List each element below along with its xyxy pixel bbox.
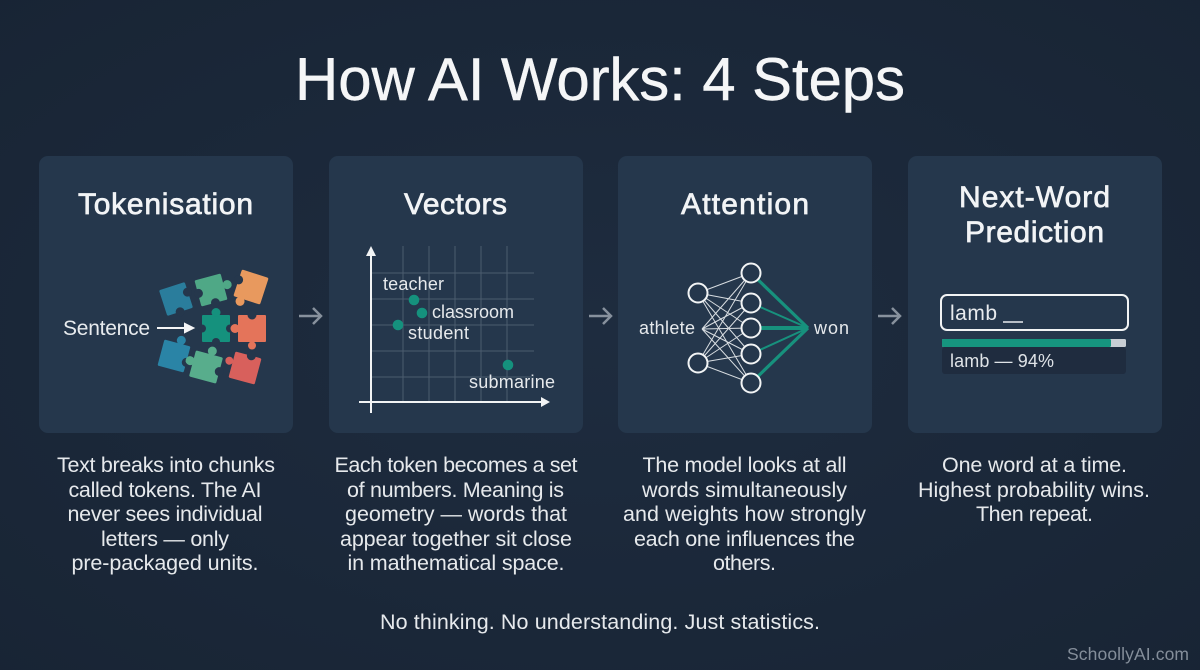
chart: word vector space: teacher xyxy=(383,274,444,294)
text: vectors description: appear together sit close xyxy=(340,527,572,551)
text: attention description: others. xyxy=(713,551,776,575)
diagram: neural network xyxy=(639,264,849,392)
arrow: step 2 to 3 xyxy=(589,308,611,324)
panel: tokenisation xyxy=(39,156,293,433)
input box: lamb xyxy=(950,302,997,325)
text: prediction description: One word at a time. xyxy=(942,453,1127,477)
probability bar xyxy=(942,339,1126,374)
text: tokenisation description: Text breaks into chunks xyxy=(57,453,275,477)
panel: next-word prediction xyxy=(908,156,1162,433)
text: vectors description: in mathematical space. xyxy=(348,551,564,575)
chart: word vector space: submarine xyxy=(469,372,555,392)
icon: puzzle pieces xyxy=(157,268,269,385)
probability bar: lamb — 94% xyxy=(950,351,1054,371)
chart: word vector space xyxy=(359,246,555,413)
heading: next-word prediction: Prediction xyxy=(965,216,1104,249)
text: tokenisation description: never sees individual xyxy=(68,502,262,526)
arrow: step 1 to 2 xyxy=(299,308,321,324)
arrow: sentence to tokens xyxy=(157,324,193,332)
text: vectors description: geometry — words that xyxy=(345,502,567,526)
text: attention description: words simultaneously xyxy=(641,478,847,502)
text: tokenisation description: called tokens. The AI xyxy=(68,478,262,502)
text: tokenisation description xyxy=(57,453,275,575)
text: vectors description xyxy=(334,453,578,575)
chart: word vector space: classroom xyxy=(432,302,514,322)
input box xyxy=(941,295,1128,330)
diagram: neural network: athlete xyxy=(639,318,695,338)
panel: attention xyxy=(618,156,872,433)
text: prediction description xyxy=(918,453,1150,526)
heading: attention: Attention xyxy=(681,188,809,221)
label: sentence: Sentence xyxy=(63,317,150,340)
text: attention description: each one influences the xyxy=(634,527,855,551)
panel: vectors xyxy=(329,156,583,433)
heading: vectors: Vectors xyxy=(404,188,507,221)
heading: next-word prediction xyxy=(959,181,1110,249)
heading: tokenisation: Tokenisation xyxy=(78,188,253,221)
text: prediction description: Highest probability wins. xyxy=(918,478,1150,502)
diagram: neural network: won xyxy=(813,318,849,338)
arrow: step 3 to 4 xyxy=(878,308,900,324)
text: tokenisation description: letters — only xyxy=(101,527,229,551)
text: attention description: The model looks at all xyxy=(642,453,846,477)
text: tokenisation description: pre-packaged units. xyxy=(72,551,258,575)
text: vectors description: Each token becomes a set xyxy=(334,453,578,477)
text: vectors description: of numbers. Meaning is xyxy=(347,478,564,502)
title: How AI Works: 4 Steps xyxy=(295,46,905,113)
footer tagline: No thinking. No understanding. Just statistics. xyxy=(380,610,820,634)
chart: word vector space: student xyxy=(408,323,469,343)
text: prediction description: Then repeat. xyxy=(976,502,1093,526)
text: attention description: and weights how strongly xyxy=(623,502,866,526)
heading: next-word prediction: Next-Word xyxy=(959,181,1110,214)
text: attention description xyxy=(623,453,866,575)
watermark: SchoollyAI.com xyxy=(1067,644,1189,664)
